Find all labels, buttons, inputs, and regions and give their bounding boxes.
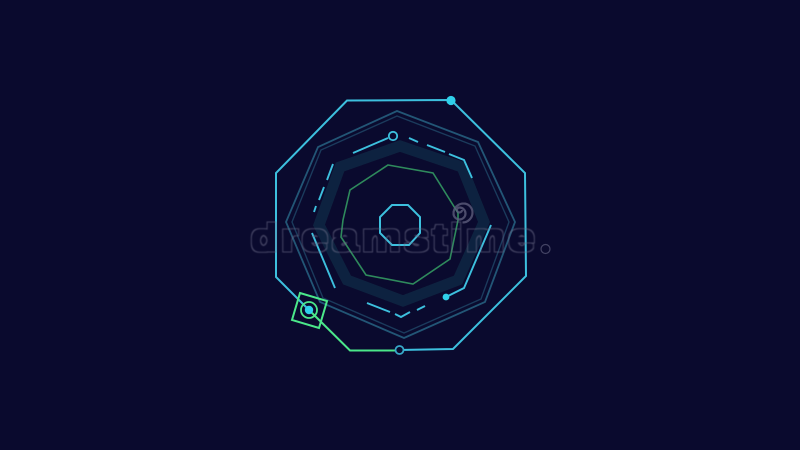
rotated square — [292, 293, 327, 328]
dashed cyan ring — [312, 138, 491, 317]
double octagon ring — [286, 111, 515, 338]
green octagon — [341, 165, 458, 284]
watermark text: dreamstime — [252, 218, 534, 258]
centre octagon — [380, 205, 420, 245]
outer octagon — [276, 100, 526, 350]
green connector line — [309, 310, 399, 350]
ring marker: top open circle — [389, 132, 397, 140]
thick band octagon — [319, 146, 484, 301]
watermark registered mark — [541, 244, 550, 254]
target ring — [301, 302, 317, 318]
ring marker: right dot — [443, 294, 449, 300]
bottom open circle — [396, 346, 404, 354]
target dot — [305, 306, 313, 314]
top dot on outer octagon — [446, 96, 456, 105]
target marker — [292, 293, 327, 328]
watermark swirl — [454, 204, 472, 222]
